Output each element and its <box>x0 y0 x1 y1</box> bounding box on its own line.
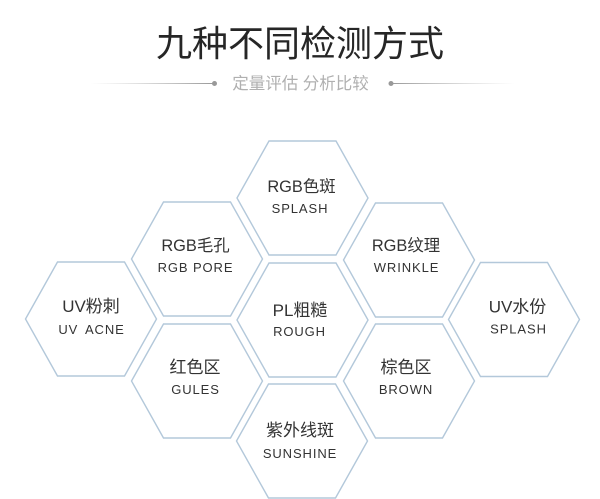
hexagon: RGB色斑 <box>237 141 368 255</box>
hexagon: RGB纹理: RGB纹理 <box>372 237 440 255</box>
hexagon: 紫外线斑: SUNSHINE <box>263 446 337 461</box>
hexagon: RGB毛孔: RGB毛孔 <box>161 237 230 255</box>
hexagon: RGB毛孔 <box>132 202 262 316</box>
hexagon: 紫外线斑 <box>236 384 368 498</box>
hexagon: UV粉刺 <box>26 262 156 376</box>
hexagon: 紫外线斑: 紫外线斑 <box>266 421 334 440</box>
hexagon: 棕色区 <box>344 324 474 438</box>
hexagon: RGB毛孔: RGB PORE <box>158 260 233 275</box>
hexagon: UV粉刺: UV粉刺 <box>62 297 120 316</box>
hexagon: 红色区: GULES <box>171 382 220 397</box>
hexagon: UV水份: UV水份 <box>489 298 546 316</box>
hexagon: PL粗糙 <box>237 263 368 377</box>
hexagon: UV水份: SPLASH <box>490 322 547 336</box>
hexagon: RGB纹理 <box>344 203 474 317</box>
hexagon: 红色区 <box>132 324 262 438</box>
hexagon: PL粗糙: ROUGH <box>273 324 326 339</box>
hexagon: RGB色斑: RGB色斑 <box>267 178 336 196</box>
hexagon: UV水份 <box>448 262 580 376</box>
hexagon: UV粉刺: UV ACNE <box>58 322 125 337</box>
title: 九种不同检测方式 <box>156 23 444 64</box>
subtitle with side rules <box>90 74 515 93</box>
hexagon: PL粗糙: PL粗糙 <box>273 301 327 320</box>
subtitle with side rules: 定量评估 分析比较 <box>232 74 369 93</box>
hexagon: 红色区: 红色区 <box>170 358 220 377</box>
hexagon: 棕色区: 棕色区 <box>380 358 432 377</box>
hexagon: RGB色斑: SPLASH <box>272 201 328 216</box>
hexagon: 棕色区: BROWN <box>379 382 433 397</box>
hexagon: RGB纹理: WRINKLE <box>374 260 439 275</box>
